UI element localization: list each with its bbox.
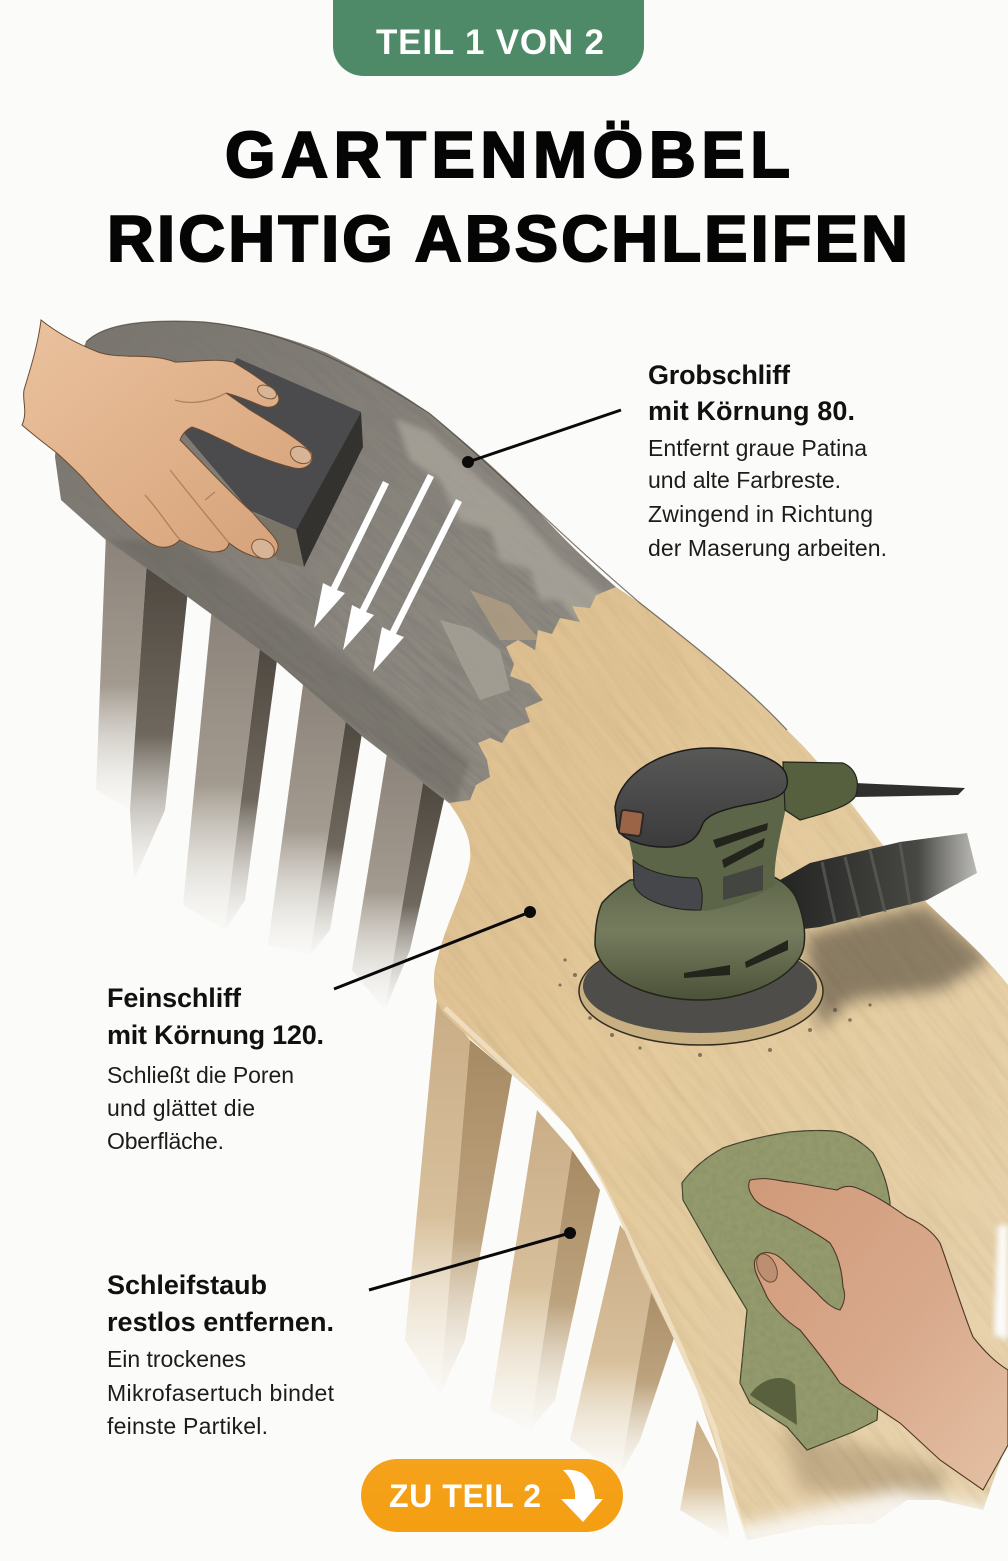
sander dark side panel [723, 865, 763, 900]
fine sanding text: und glättet die [107, 1095, 255, 1121]
fine sanding text: Oberfläche. [107, 1128, 224, 1154]
sanded wooden spindles [405, 1000, 730, 1540]
cloth fold shadow [750, 1378, 797, 1425]
remove dust text [107, 1270, 335, 1439]
icon: curved down arrow [561, 1470, 603, 1522]
sander dark grip band [633, 860, 702, 910]
coarse sanding text: Grobschliff [648, 360, 791, 390]
callout: fine sanding [107, 906, 536, 1154]
icon: direction arrows on the grain [314, 474, 462, 672]
remove dust text: Ein trockenes [107, 1346, 246, 1372]
cloth texture [675, 1125, 895, 1455]
wiping hand silhouette [749, 1179, 1008, 1490]
sander dust hose [780, 833, 977, 930]
icon: sanding block [184, 358, 363, 567]
sander green neck [628, 770, 790, 911]
remove dust text: restlos entfernen. [107, 1307, 334, 1337]
title [107, 118, 908, 275]
thumb nail [753, 1251, 781, 1285]
remove dust text: Schleifstaub [107, 1270, 267, 1300]
sander rear handle [783, 762, 857, 820]
dust around the sander [558, 958, 872, 1057]
button background [361, 1459, 623, 1532]
sanded light wood armrest [420, 540, 1008, 1550]
fine sanding text: Feinschliff [107, 983, 242, 1013]
badge background [333, 0, 644, 76]
coarse sanding text: Zwingend in Richtung [648, 501, 873, 527]
hand silhouette [22, 320, 313, 559]
title line 2: RICHTIG ABSCHLEIFEN [107, 202, 908, 275]
arrow 1 [314, 481, 389, 628]
icon: microfibre cloth [675, 1125, 895, 1455]
icon: orbital sander [579, 748, 977, 1045]
coarse sanding text: und alte Farbreste. [648, 467, 841, 493]
coarse sanding text: mit Körnung 80. [648, 396, 855, 426]
sanding block end face [250, 512, 304, 567]
illustration: garden chair armrest [40, 310, 1008, 1550]
callout: remove dust [107, 1227, 576, 1439]
sander sanding disc [579, 937, 823, 1045]
armrest outline [86, 321, 787, 730]
remove dust text: feinste Partikel. [107, 1413, 268, 1439]
callout: coarse sanding [462, 360, 887, 561]
title line 1: GARTENMÖBEL [225, 118, 790, 191]
sanding block side face [296, 412, 363, 567]
weathered grey armrest section [55, 321, 616, 803]
leader line to spindle [369, 1227, 576, 1290]
badge label: TEIL 1 VON 2 [376, 23, 604, 62]
icon: hand wiping with cloth [749, 1179, 1008, 1490]
coarse sanding text: der Maserung arbeiten. [648, 535, 887, 561]
finger separations and knuckles [145, 393, 238, 543]
cloth shape [682, 1130, 890, 1450]
fine sanding text [107, 983, 324, 1154]
sander power cable [855, 783, 965, 797]
arrow 2 [343, 474, 434, 650]
coarse sanding text [648, 360, 887, 561]
leader line to sanded wood [334, 906, 536, 989]
sander domed top [615, 748, 787, 847]
button label: ZU TEIL 2 [389, 1478, 541, 1514]
icon: hand on sanding block [22, 320, 314, 563]
sander green base [595, 875, 805, 1000]
arrow 3 [373, 499, 462, 672]
finger nails [248, 382, 314, 563]
fine sanding text: mit Körnung 120. [107, 1020, 324, 1050]
sander vents [684, 823, 788, 978]
fine sanding text: Schließt die Poren [107, 1062, 294, 1088]
top badge [333, 0, 644, 76]
sanding block top face [184, 358, 361, 530]
coarse sanding text: Entfernt graue Patina [648, 435, 867, 461]
button: to part 2 [361, 1459, 623, 1532]
leader line to grey wood [462, 410, 621, 468]
sander switch [618, 810, 644, 836]
weathered grey spindles [96, 533, 445, 1010]
remove dust text: Mikrofasertuch bindet [107, 1380, 335, 1406]
